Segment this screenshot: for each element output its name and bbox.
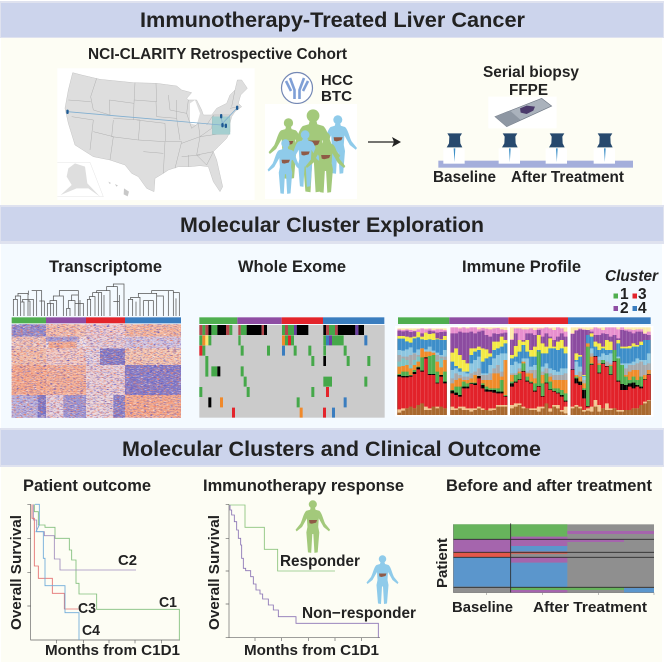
axis labels: Baseline, After Treatment [452, 599, 647, 616]
axis label: Months from C1D1: Months from C1D1 [244, 642, 380, 659]
mutation oncoplot [199, 317, 385, 418]
curve labels: C2 [118, 552, 137, 569]
label: Baseline, After Treatment: After Treatment [511, 169, 624, 186]
heading: NCI-CLARITY cohort: NCI-CLARITY Retrospective Cohort [88, 46, 347, 63]
legend: cluster: 2 [620, 300, 629, 317]
icon: non-responder figure [366, 555, 398, 604]
axis labels: Baseline, After Treatment: After Treatment [533, 599, 647, 616]
curve: C2 [33, 504, 136, 570]
chart: cluster transition [453, 523, 654, 595]
arrow: to serial biopsy [368, 137, 401, 147]
label: HCC BTC: BTC [321, 88, 352, 105]
icon: biopsy slide [488, 97, 557, 128]
treatment timeline with biopsy pins [438, 133, 633, 168]
axis label: Overall Survival: Overall Survival [8, 515, 25, 630]
panel: clinical outcome [1, 467, 662, 662]
legend: cluster [605, 268, 659, 317]
heading: Whole Exome: Whole Exome [238, 258, 346, 276]
icon: antibody [282, 72, 312, 104]
chart: survival by response [226, 504, 380, 641]
curve: responder [229, 505, 335, 571]
label: HCC BTC [321, 72, 353, 105]
axis label: Patient: Patient [434, 538, 451, 588]
axis label: Months from C1D1: Months from C1D1 [45, 642, 181, 659]
header: Immunotherapy-Treated Liver Cancer: Immunotherapy-Treated Liver Cancer [140, 7, 526, 32]
chart: survival by cluster [27, 504, 180, 643]
curve labels: C4 [82, 622, 101, 639]
curve: non-responder [230, 505, 378, 638]
heading: Before and after treatment: Before and after treatment [446, 476, 652, 495]
label: Serial biopsy FFPE: Serial biopsy [483, 64, 579, 81]
group 3 bars [510, 327, 567, 415]
label: Baseline, After Treatment [433, 169, 624, 186]
legend: cluster: 4 [638, 300, 647, 317]
curve: C3 [32, 504, 78, 609]
heatmap with dendrogram [12, 284, 181, 418]
label: Non-responder: Non−responder [302, 605, 416, 622]
label: Serial biopsy FFPE [483, 64, 579, 99]
heading: Immunotherapy response: Immunotherapy response [203, 476, 404, 495]
legend: cluster: 3 [638, 286, 647, 303]
panel: molecular exploration [1, 244, 662, 428]
heatmap cells [12, 324, 181, 418]
curve labels: C1 [159, 594, 177, 611]
cluster colour bar [12, 317, 46, 323]
heading: Patient outcome: Patient outcome [23, 477, 151, 495]
curve: C4 [35, 504, 79, 640]
heading: Transcriptome: Transcriptome [49, 257, 162, 276]
group 2 bars [450, 327, 507, 415]
group 4 bars [571, 327, 651, 415]
header: Molecular Cluster Exploration [0, 205, 664, 244]
curve labels: C3 [78, 600, 96, 617]
axis label: Overall Survival: Overall Survival [206, 515, 223, 630]
immune profile stacked bars [395, 317, 653, 417]
icon: responder figure [296, 500, 330, 553]
label: HCC BTC: HCC [321, 72, 353, 89]
group 1 bars [397, 328, 447, 415]
panel: retrospective cohort [1, 38, 662, 205]
label: Baseline, After Treatment: Baseline [433, 169, 496, 186]
legend: cluster: Cluster [605, 268, 659, 285]
curve: C1 [34, 504, 179, 640]
patient figures group [265, 104, 357, 199]
dendrogram [13, 284, 179, 316]
label: Serial biopsy FFPE: FFPE [509, 82, 548, 99]
heading: Immune Profile: Immune Profile [462, 258, 581, 276]
header: Molecular Clusters and Clinical Outcome [0, 428, 664, 467]
header: Molecular Clusters and Clinical Outcome: Molecular Clusters and Clinical Outcome [122, 436, 541, 461]
header: Immunotherapy-Treated Liver Cancer [0, 1, 664, 38]
icon: pins [447, 133, 613, 162]
map of the United States [57, 68, 255, 200]
axis labels: Baseline, After Treatment: Baseline [452, 599, 513, 616]
label: Responder: Responder [280, 553, 360, 570]
curve labels [78, 552, 177, 639]
header: Molecular Cluster Exploration: Molecular Cluster Exploration [180, 212, 484, 237]
legend: cluster: 1 [620, 286, 629, 303]
